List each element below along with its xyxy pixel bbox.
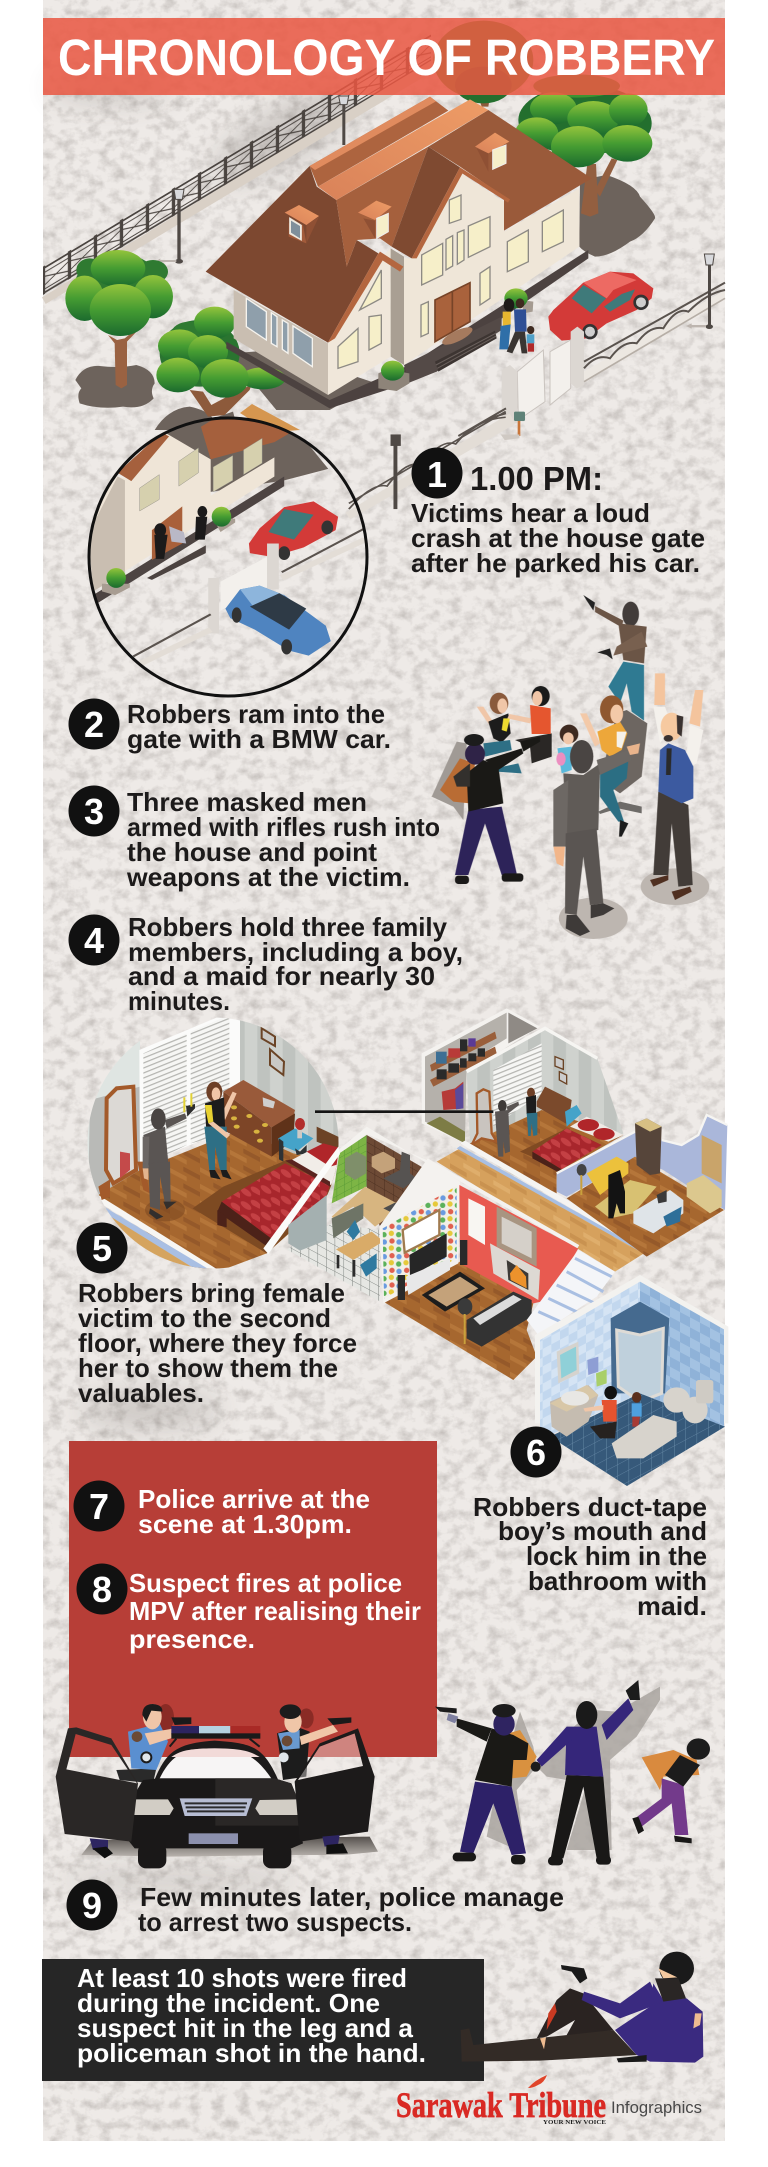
house shadow (230, 350, 376, 410)
illustration: house scene, rear and left side (42, 33, 446, 430)
logo: Sarawak Tribune: YOUR NEW VOICE (543, 2120, 606, 2126)
zoomed house (88, 400, 328, 603)
kitchen (287, 1127, 452, 1302)
walls (234, 173, 579, 395)
summary text: policeman shot in the hand. (77, 2038, 426, 2068)
illustration: hostage group (432, 595, 709, 939)
step 4: members, including a boy, (128, 937, 463, 967)
step 8: MPV after realising their (129, 1596, 421, 1626)
step 6: boy’s mouth and (498, 1516, 707, 1546)
nightstand and lamp (278, 1118, 313, 1162)
step 1: 1.00 PM: (470, 460, 603, 497)
step 4: and a maid for nearly 30 (128, 961, 435, 991)
title text: CHRONOLOGY OF ROBBERY (58, 29, 715, 86)
lamp posts (156, 96, 349, 264)
small robber and victim (495, 1088, 537, 1157)
tree shadow near lens (155, 407, 238, 430)
light bar (170, 1726, 260, 1747)
masked robber (143, 1093, 195, 1221)
fence: upper left (42, 33, 446, 304)
zoomed gate (208, 544, 279, 633)
step 4: minutes. (128, 986, 230, 1016)
connector line (315, 1110, 493, 1113)
illustration: main house (206, 97, 725, 440)
tree: front left (156, 307, 286, 417)
magnifier: robbers crash gate (88, 400, 367, 696)
panel: black summary box (42, 1959, 484, 2081)
logo: Sarawak Tribune (396, 2075, 702, 2126)
car roof and windshield (155, 1741, 278, 1779)
panel: red police box (69, 1441, 437, 1757)
step 3: armed with rifles rush into (127, 812, 440, 842)
illustration: house interior rooms (263, 1008, 728, 1486)
staircase (527, 1250, 615, 1335)
step 3: Three masked men (127, 787, 367, 817)
step 5: victim to the second (78, 1303, 331, 1333)
step 9 (66, 1880, 564, 1937)
title banner (43, 18, 725, 95)
mailbox (514, 412, 525, 436)
fence and gate continuation (345, 411, 519, 519)
step 4: 4 (84, 920, 104, 961)
step 3: the house and point (127, 837, 377, 867)
step 7: scene at 1.30pm. (138, 1509, 352, 1539)
car body (128, 1778, 303, 1868)
summary text: suspect hit in the leg and a (77, 2013, 414, 2043)
illustration: injured robber (461, 1952, 703, 2063)
summary text: At least 10 shots were fired (77, 1963, 407, 1993)
side windows (246, 298, 312, 367)
step 5: 5 (92, 1228, 112, 1269)
step 9: 9 (82, 1885, 102, 1926)
black robber with bag (432, 734, 540, 884)
step 2: gate with a BMW car. (127, 724, 391, 754)
summary text (77, 1963, 426, 2068)
family figures (499, 298, 534, 353)
police officer left (116, 1704, 191, 1783)
tree: behind title band (433, 21, 533, 107)
plank behind magnifier (240, 404, 300, 432)
robbers at door (154, 506, 207, 559)
zoomed fences (133, 528, 365, 664)
step 1: crash at the house gate (411, 523, 705, 553)
police officer right (277, 1704, 351, 1780)
step 5: valuables. (78, 1378, 204, 1408)
robber with cap and bag (435, 1704, 537, 1864)
kitchen edge wall over lens (263, 1147, 340, 1254)
step 9: to arrest two suspects. (138, 1907, 412, 1937)
step 6: 6 (526, 1432, 546, 1473)
mirror small (472, 1089, 497, 1145)
fence: left of gate (458, 408, 506, 440)
gate (502, 327, 584, 423)
step 2 (68, 698, 391, 754)
planters (378, 288, 533, 391)
boy (556, 725, 578, 773)
step 7: 7 (89, 1486, 109, 1527)
bedroom wall and wardrobe (80, 1013, 343, 1195)
left door (56, 1727, 138, 1842)
step 6: lock him in the (526, 1541, 707, 1571)
step 8: presence. (129, 1624, 255, 1654)
tree: right of house with shadow (515, 74, 655, 257)
fence: right of gate (584, 283, 725, 382)
robber running with bag (632, 1738, 710, 1843)
step 6: maid. (637, 1591, 707, 1621)
robber in purple (531, 1680, 640, 1865)
step 1: 1 (427, 454, 447, 495)
logo label: Infographics (611, 2098, 702, 2117)
seated woman in black (477, 693, 522, 773)
tree: left, with shadow (65, 250, 173, 408)
chest of drawers (223, 1080, 295, 1157)
hallway floor (437, 1141, 649, 1272)
step 3: 3 (84, 791, 104, 832)
step 8: Suspect fires at police (129, 1568, 402, 1598)
legs and shoes (90, 1835, 348, 1858)
step 4 (68, 912, 463, 1016)
robber on chair back (583, 595, 647, 721)
step 6 (473, 1426, 707, 1621)
step 7: Police arrive at the (138, 1484, 370, 1514)
step 1: after he parked his car. (411, 548, 700, 578)
illustration: police car and officers (56, 1704, 378, 1868)
ground shadow (81, 1837, 378, 1857)
step 1: Victims hear a loud (411, 498, 650, 528)
mirror (98, 1087, 150, 1200)
bathroom (535, 1275, 728, 1486)
dormers (285, 133, 509, 243)
step 5: floor, where they force (78, 1328, 357, 1358)
office room (557, 1115, 727, 1257)
step 5 (76, 1222, 357, 1408)
front door with mat and steps (435, 283, 497, 372)
man with raised hands (641, 673, 709, 905)
step 1 (411, 448, 705, 578)
step 4: Robbers hold three family (128, 912, 448, 942)
blue BMW car (225, 586, 331, 656)
logo: Sarawak Tribune: Sarawak Tribune (396, 2085, 606, 2125)
step 5: Robbers bring female (78, 1278, 345, 1308)
bed (217, 1127, 342, 1247)
red car (548, 272, 653, 341)
front windows (338, 195, 563, 368)
step 8: 8 (92, 1569, 112, 1610)
seated girl in red (507, 686, 552, 763)
step 3 (68, 786, 440, 892)
robber shadows (487, 1687, 660, 1853)
step 3: weapons at the victim. (126, 862, 410, 892)
step 2: 2 (84, 704, 104, 745)
zoomed red car (249, 501, 338, 560)
grey robber (553, 740, 640, 939)
step 6: bathroom with (528, 1566, 707, 1596)
woman (204, 1082, 237, 1179)
lens: bedroom close up (80, 1013, 343, 1273)
step 2: Robbers ram into the (127, 699, 385, 729)
illustration: robbers (435, 1680, 710, 1865)
bedroom (460, 1028, 623, 1193)
step 8 (76, 1564, 421, 1654)
living room (379, 1160, 578, 1380)
step 7 (74, 1480, 370, 1539)
woman on office chair (580, 695, 647, 837)
closet room (422, 1008, 540, 1143)
foundation (226, 250, 588, 408)
lamp post right (686, 254, 714, 329)
roof (206, 97, 592, 343)
bedroom floor (95, 1130, 342, 1273)
summary text: during the incident. One (77, 1988, 380, 2018)
step 9: Few minutes later, police manage (140, 1882, 564, 1912)
right door (295, 1728, 375, 1842)
step 5: her to show them the (78, 1353, 338, 1383)
step 6: Robbers duct-tape (473, 1492, 707, 1522)
